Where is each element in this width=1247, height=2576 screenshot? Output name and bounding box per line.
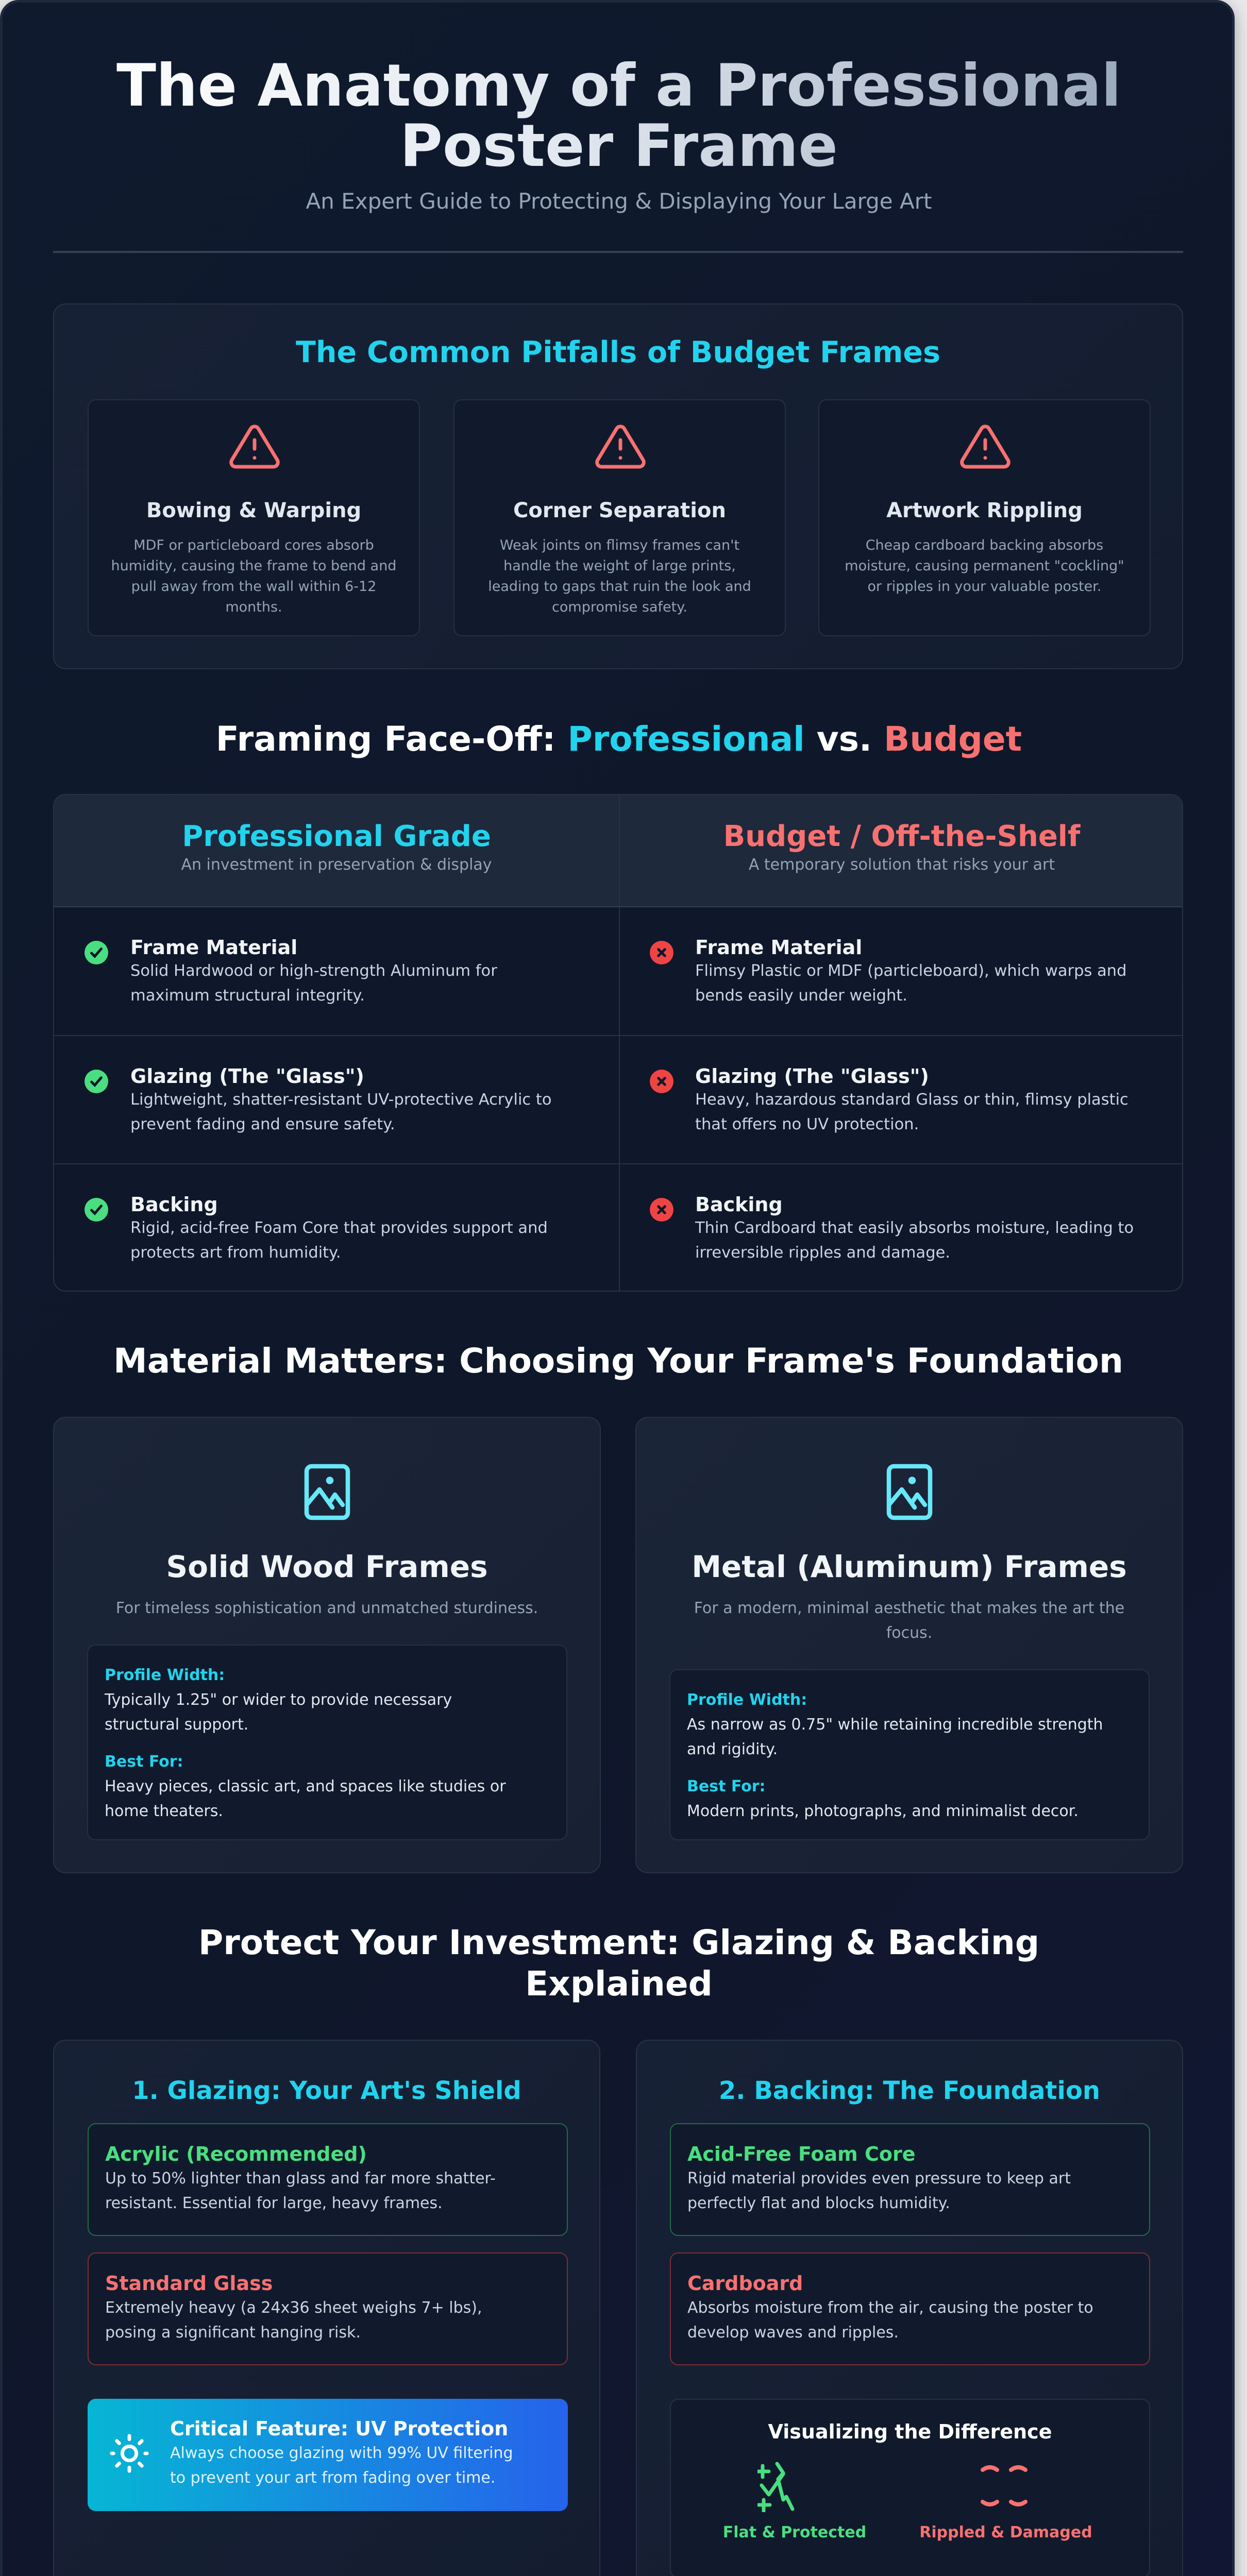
pitfalls heading: The Common Pitfalls of Budget Frames <box>296 335 940 369</box>
header: budget: Budget / Off-the-Shelf <box>723 820 1080 853</box>
spec box: Best For: <box>105 1753 183 1771</box>
pitfall card: rippling: moisture, causing permanent "cockling" <box>845 558 1124 574</box>
icon: sun <box>110 2434 149 2473</box>
spec box <box>87 1645 567 1840</box>
box: cardboard: develop waves and ripples. <box>687 2324 899 2342</box>
row: backing pro: Backing <box>130 1193 218 1216</box>
spec box: Typically 1.25" or wider to provide necessary <box>105 1691 452 1709</box>
row: frame material budget: bends easily under weight. <box>695 987 907 1005</box>
title: Poster Frame <box>400 112 838 180</box>
box: acrylic: Acrylic (Recommended) <box>105 2143 367 2165</box>
pitfall card: rippling: Cheap cardboard backing absorbs <box>866 537 1103 553</box>
spec box: and rigidity. Modern prints, photographs, and minimalist decor. <box>687 1740 1079 1820</box>
header: budget: A temporary solution that risks your art <box>749 856 1055 874</box>
panel: glazing <box>53 2040 600 2576</box>
row: glazing budget: Heavy, hazardous standard Glass or thin, flimsy plastic <box>695 1091 1128 1109</box>
pitfall card: bowing: pull away from the wall within 6-12 <box>131 579 376 595</box>
icon: image <box>886 1464 933 1520</box>
pitfall card: bowing: Bowing & Warping <box>146 499 361 522</box>
pitfall card: rippling <box>818 399 1151 636</box>
row: glazing pro <box>85 1065 551 1133</box>
box: standard glass <box>88 2252 568 2365</box>
callout: UV protection <box>88 2399 568 2511</box>
row: backing pro: Rigid, acid-free Foam Core that provides support and <box>130 1219 548 1237</box>
box: standard glass: Extremely heavy (a 24x36 sheet weighs 7+ lbs), <box>105 2299 482 2317</box>
row: frame material pro: Frame Material <box>130 936 297 959</box>
panel: metal <box>635 1417 1183 1873</box>
icon: warning <box>960 425 1010 469</box>
pitfall card: corner separation: handle the weight of large prints, <box>503 558 736 574</box>
row: backing pro <box>85 1193 548 1262</box>
box: visualizing the difference: Rippled & Damaged <box>919 2523 1092 2541</box>
icon: warning <box>229 425 280 469</box>
box: foam core: perfectly flat and blocks humidity. <box>687 2194 950 2212</box>
subtitle: An Expert Guide to Protecting & Displaying Your Large Art <box>306 189 932 214</box>
panel: metal: For a modern, minimal aesthetic that makes the art the <box>694 1599 1124 1617</box>
panel: backing: 2. Backing: The Foundation <box>719 2076 1100 2105</box>
spec box: As narrow as 0.75" while retaining incredible strength <box>687 1716 1103 1734</box>
row: glazing budget: that offers no UV protection. <box>695 1115 919 1133</box>
spec box: Best For: <box>687 1777 766 1795</box>
row: backing pro: protects art from humidity. <box>130 1244 341 1262</box>
panel: glazing: 1. Glazing: Your Art's Shield <box>132 2076 521 2105</box>
heading: protect your investment <box>198 1923 1039 2004</box>
pitfall card: corner separation: Weak joints on flimsy frames can't <box>500 537 739 553</box>
header: budget <box>723 820 1081 874</box>
pitfall card: rippling: Artwork Rippling <box>886 499 1083 522</box>
row: backing budget <box>650 1193 1134 1262</box>
comparison table <box>53 794 1183 1292</box>
box: acrylic: resistant. Essential for large, heavy frames. <box>105 2194 443 2212</box>
icon: flat check <box>757 2462 795 2512</box>
row: backing budget: irreversible ripples and damage. <box>695 1244 950 1262</box>
row: glazing pro: Lightweight, shatter-resistant UV-protective Acrylic to <box>130 1091 551 1109</box>
icon: image <box>304 1464 350 1520</box>
callout: UV protection: Always choose glazing with 99% UV filtering <box>170 2444 513 2462</box>
spec box: Profile Width: <box>105 1666 225 1684</box>
title <box>55 56 1183 176</box>
pitfall card: corner separation: Corner Separation <box>513 499 726 522</box>
box: foam core: Rigid material provides even pressure to keep art <box>687 2170 1071 2188</box>
row: glazing budget <box>650 1065 1128 1133</box>
panel: metal: focus. <box>886 1624 932 1642</box>
pitfall card: bowing: months. <box>225 599 282 615</box>
row: frame material budget: Flimsy Plastic or MDF (particleboard), which warps and <box>695 962 1126 980</box>
panel: common pitfalls <box>53 303 1183 669</box>
pitfall card: corner separation <box>453 399 786 636</box>
panel: solid wood: Solid Wood Frames <box>166 1549 488 1584</box>
row: glazing pro: Glazing (The "Glass") <box>130 1065 364 1088</box>
row: frame material pro <box>85 936 497 1005</box>
spec box: structural support. Heavy pieces, classic art, and spaces like studies or <box>105 1716 506 1795</box>
header: professional: An investment in preservation & display <box>181 856 492 874</box>
row: frame material budget: Frame Material <box>695 936 862 959</box>
header: professional: Professional Grade <box>182 820 491 853</box>
callout: UV protection: to prevent your art from fading over time. <box>170 2469 495 2487</box>
box: visualizing the difference: Visualizing the Difference <box>768 2420 1052 2443</box>
box: standard glass: posing a significant hanging risk. <box>105 2324 361 2342</box>
spec box <box>669 1669 1150 1840</box>
row: frame material budget <box>650 936 1126 1005</box>
pitfall card: bowing: MDF or particleboard cores absorb <box>133 537 374 553</box>
pitfall card: bowing <box>88 399 420 636</box>
pitfall card: corner separation: compromise safety. <box>552 599 687 615</box>
heading: face-off: Framing Face-Off: Professional vs. Budget <box>216 719 1022 759</box>
icon: ripples <box>981 2465 1027 2507</box>
header: professional <box>181 820 492 874</box>
pitfall card: bowing: humidity, causing the frame to bend and <box>111 558 396 574</box>
row: frame material pro: Solid Hardwood or high-strength Aluminum for <box>130 962 497 980</box>
box: visualizing the difference: Flat & Protected <box>723 2523 866 2541</box>
panel: solid wood: For timeless sophistication and unmatched sturdiness. <box>116 1599 538 1617</box>
box: cardboard: Absorbs moisture from the air, causing the poster to <box>687 2299 1093 2317</box>
box: acrylic <box>88 2123 568 2236</box>
box: acrylic: Up to 50% lighter than glass and far more shatter- <box>105 2170 496 2188</box>
icon: warning <box>595 425 646 469</box>
callout: UV protection: Critical Feature: UV Protection <box>170 2417 508 2440</box>
box: foam core: Acid-Free Foam Core <box>687 2143 915 2165</box>
heading: protect your investment: Protect Your Investment: Glazing & Backing <box>198 1923 1039 1962</box>
pitfall card: rippling: or ripples in your valuable poster. <box>868 579 1101 595</box>
box: foam core <box>670 2123 1150 2236</box>
row: backing budget: Backing <box>695 1193 783 1216</box>
box: visualizing the difference <box>670 2399 1150 2576</box>
box: cardboard <box>670 2252 1150 2365</box>
panel: metal: Metal (Aluminum) Frames <box>692 1549 1127 1584</box>
panel: solid wood <box>53 1417 601 1873</box>
title: The Anatomy of a Professional <box>116 52 1121 120</box>
row: glazing budget: Glazing (The "Glass") <box>695 1065 929 1088</box>
spec box: Profile Width: <box>687 1691 807 1709</box>
pitfall card: corner separation: leading to gaps that ruin the look and <box>488 579 751 595</box>
box: cardboard: Cardboard <box>687 2272 803 2295</box>
row: frame material pro: maximum structural integrity. <box>130 987 365 1005</box>
panel: backing <box>636 2040 1183 2576</box>
row: glazing pro: prevent fading and ensure safety. <box>130 1115 395 1133</box>
row: backing budget: Thin Cardboard that easily absorbs moisture, leading to <box>695 1219 1134 1237</box>
spec box: home theaters. <box>105 1802 223 1820</box>
heading: material matters: Material Matters: Choosing Your Frame's Foundation <box>113 1341 1123 1381</box>
heading: protect your investment: Explained <box>525 1964 713 2004</box>
box: standard glass: Standard Glass <box>105 2272 273 2295</box>
